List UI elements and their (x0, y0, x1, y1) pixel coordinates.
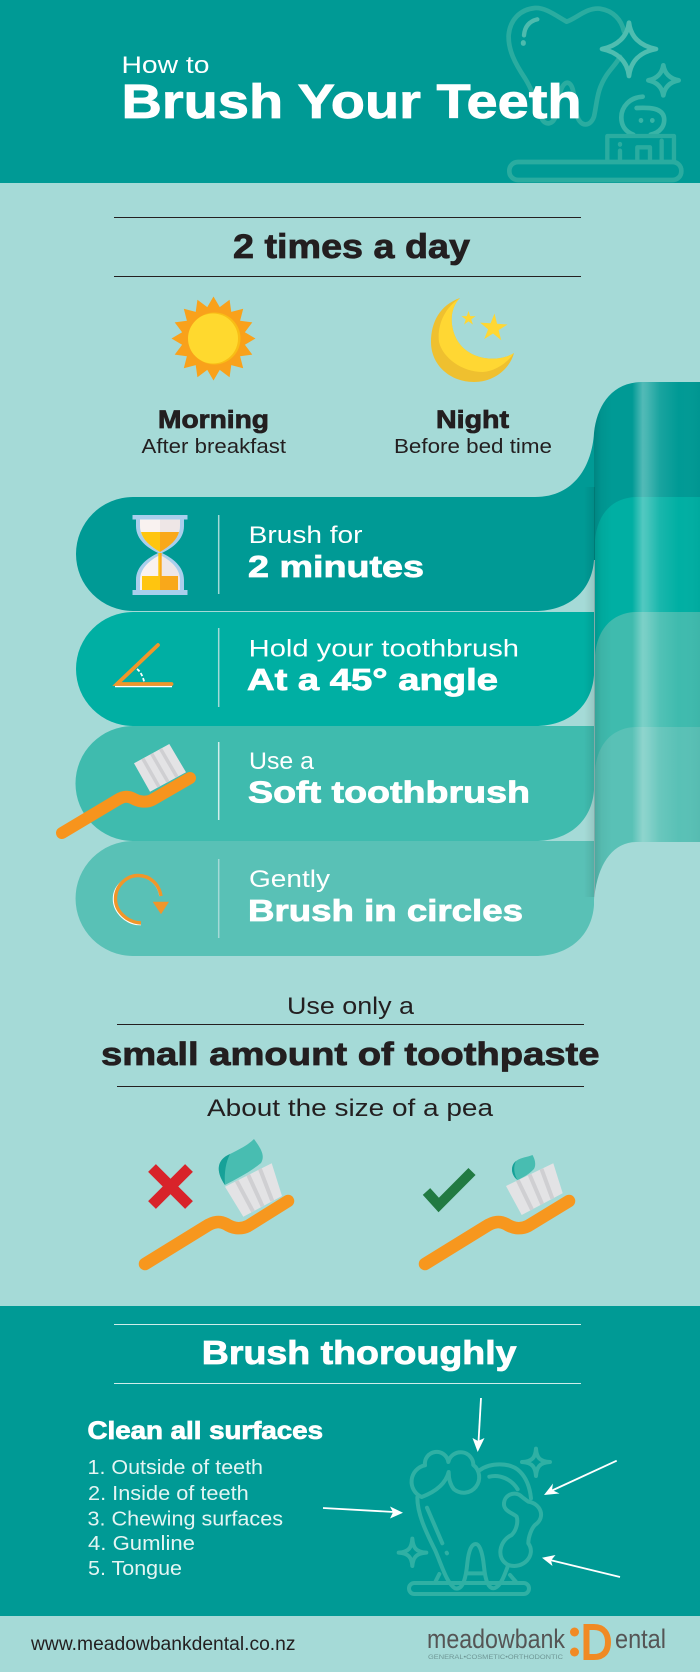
heading: toothpaste amount: Use only a (287, 993, 415, 1020)
text: clean all surfaces: 4. Gumline (88, 1532, 195, 1555)
heading: toothpaste amount: About the size of a pea (207, 1095, 494, 1122)
text: step 1: Brush for (249, 522, 363, 549)
text: clean all surfaces: 3. Chewing surfaces (88, 1508, 283, 1531)
heading: 2 times a day: 2 times a day (233, 228, 470, 266)
text: clean all surfaces: 1. Outside of teeth (88, 1456, 263, 1479)
step: hold at 45 degree angle (115, 628, 519, 707)
panel: ribbon steps (75, 382, 700, 965)
text: clean all surfaces: 5. Tongue (88, 1557, 182, 1580)
logo: meadowbank dental: meadowbank (427, 1624, 565, 1654)
icon: large sparkle (602, 23, 656, 76)
text: morning: Morning (158, 406, 269, 434)
text: step 4 (248, 866, 523, 928)
arrow: top (472, 1398, 484, 1452)
icon: hourglass (132, 515, 188, 595)
text: morning (142, 406, 286, 458)
footer: website: www.meadowbankdental.co.nz (30, 1634, 295, 1655)
text: step 2: Hold your toothbrush (249, 636, 519, 663)
title: how to: How to (122, 52, 210, 79)
icon: moon and stars (431, 298, 514, 382)
heading: toothpaste amount: small amount of toothpaste (101, 1036, 600, 1072)
logo: meadowbank dental: ental (615, 1624, 666, 1654)
text: step 3 (248, 748, 530, 810)
icon: tooth and toothbrush outline (509, 8, 681, 180)
text: clean all surfaces: Clean all surfaces (88, 1417, 323, 1445)
text: step 1: 2 minutes (248, 549, 424, 584)
icon: angle (115, 645, 172, 686)
icon: circular arrow (114, 876, 169, 925)
header banner (0, 0, 700, 183)
heading: toothpaste amount (101, 993, 600, 1122)
title (122, 52, 582, 129)
step: brush gently in circles (114, 859, 523, 938)
icon: small sparkle (648, 65, 679, 95)
logo: meadowbank dental (427, 1624, 666, 1661)
step: brush for 2 minutes (132, 515, 424, 595)
icon: toothbrush with too much paste (145, 1139, 288, 1264)
text: step 2 (247, 636, 519, 697)
text: step 2: At a 45° angle (247, 662, 498, 697)
icon: toothbrush with pea of paste (425, 1155, 569, 1264)
text: morning: After breakfast (142, 436, 286, 458)
arrow: upper right (544, 1461, 617, 1495)
text: clean all surfaces: 2. Inside of teeth (88, 1482, 249, 1505)
arrow: left (323, 1506, 403, 1518)
panel: brush thoroughly (0, 1306, 700, 1616)
icon: brush handle (509, 162, 681, 180)
text: step 3: Soft toothbrush (248, 775, 530, 810)
icon: green check (426, 1172, 472, 1205)
icon: foamy tooth outline (399, 1449, 550, 1594)
text: step 1 (248, 522, 424, 584)
icon: bristles (607, 136, 674, 160)
heading: brush thoroughly: Brush thoroughly (202, 1334, 517, 1371)
icon: toothbrush (62, 744, 190, 833)
logo: meadowbank dental: GENERAL•COSMETIC•ORTHODONTIC (428, 1655, 564, 1661)
text: step 4: Gently (249, 866, 330, 893)
text: step 4: Brush in circles (248, 893, 523, 928)
text: clean all surfaces (88, 1417, 323, 1580)
text: night: Night (436, 406, 510, 434)
icon: toothpaste blob (621, 97, 664, 135)
text: night (394, 406, 552, 458)
title: brush your teeth: Brush Your Teeth (122, 76, 582, 129)
icon: sun (172, 296, 256, 380)
text: step 3: Use a (249, 748, 315, 775)
text: night: Before bed time (394, 436, 552, 458)
arrow: lower right (542, 1555, 620, 1577)
step: use a soft toothbrush (62, 742, 530, 833)
icon: red cross (152, 1168, 189, 1205)
